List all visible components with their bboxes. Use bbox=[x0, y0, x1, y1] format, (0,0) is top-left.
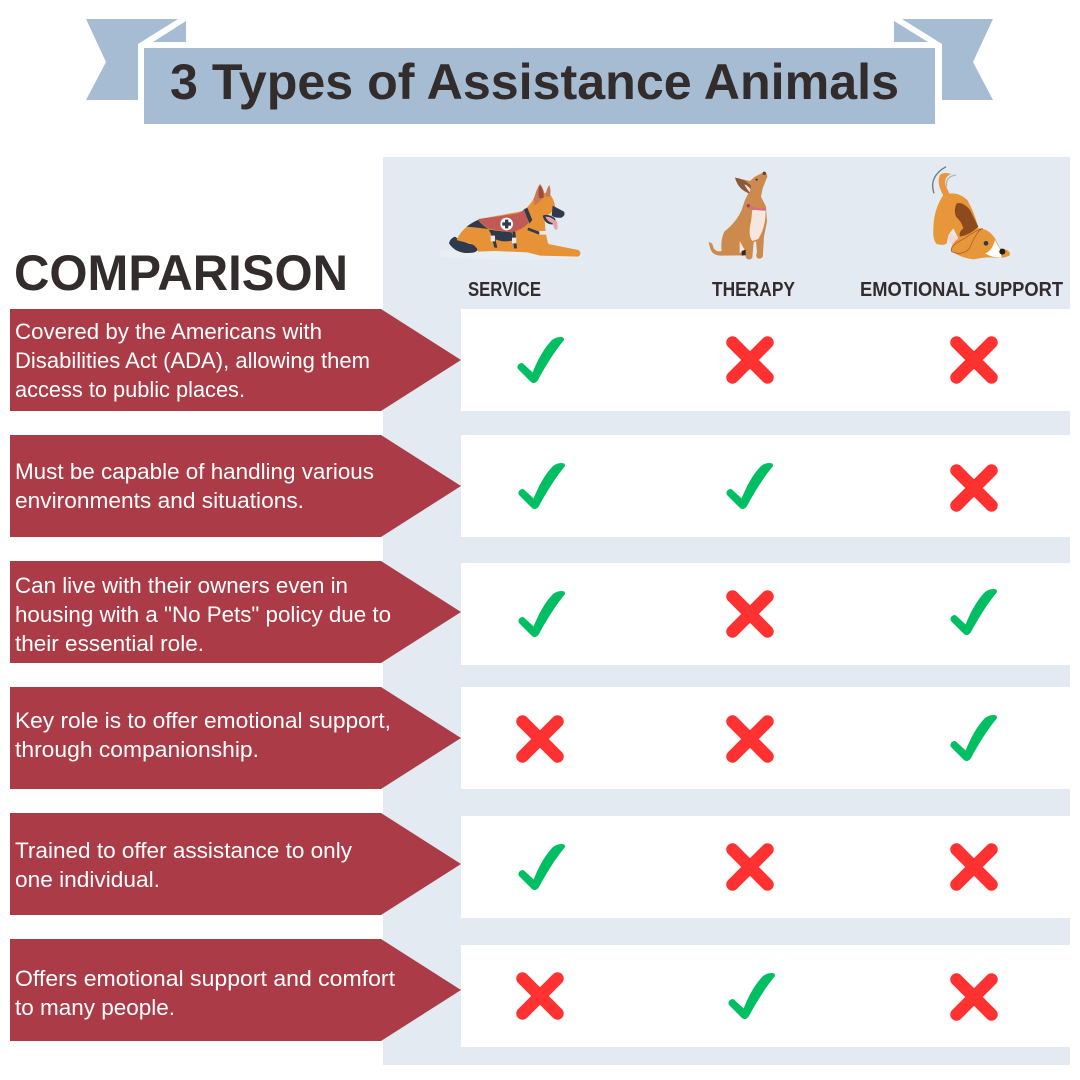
row 3 emotional: check bbox=[950, 589, 997, 635]
row 5 bbox=[10, 813, 1070, 918]
row 4 text: Key role is to offer emotional support, bbox=[15, 708, 391, 733]
banner left ribbon tail bbox=[86, 19, 178, 100]
row 4 service: cross bbox=[522, 722, 558, 756]
row 6 text: to many people. bbox=[15, 995, 175, 1020]
row 4 white strip bbox=[461, 687, 1070, 789]
title: 3 Types of Assistance Animals bbox=[170, 54, 899, 110]
row 1 emotional: cross bbox=[956, 342, 992, 378]
row 4 bbox=[10, 687, 1070, 789]
row 6 arrow label bbox=[10, 939, 461, 1041]
row 6 bbox=[10, 939, 1070, 1047]
row 2 service: check bbox=[518, 463, 565, 509]
row 2 bbox=[10, 435, 1070, 537]
banner main plate bbox=[144, 48, 935, 124]
row 2 arrow label bbox=[10, 435, 461, 537]
row 2 white strip bbox=[461, 435, 1070, 537]
row 3 text: Can live with their owners even in bbox=[15, 573, 348, 598]
icon: service dog bbox=[440, 184, 583, 260]
row 1 text bbox=[15, 319, 370, 402]
row 3 text: housing with a "No Pets" policy due to bbox=[15, 602, 391, 627]
row 1 bbox=[10, 309, 1070, 411]
column header: therapy: THERAPY bbox=[712, 279, 796, 301]
panel: comparison table background bbox=[383, 157, 1070, 1065]
row 4 arrow label bbox=[10, 687, 461, 789]
row 6 emotional: cross bbox=[956, 980, 992, 1014]
row 5 text: one individual. bbox=[15, 867, 160, 892]
row 6 service: cross bbox=[522, 978, 558, 1014]
row 4 text: through companionship. bbox=[15, 737, 259, 762]
row 1 text: Covered by the Americans with bbox=[15, 319, 322, 344]
row 1 white strip bbox=[461, 309, 1070, 411]
banner right ribbon tail bbox=[902, 19, 993, 100]
column header: service: SERVICE bbox=[468, 279, 541, 301]
row 4 therapy: cross bbox=[732, 722, 768, 756]
row 5 emotional: cross bbox=[956, 850, 992, 884]
row 5 text: Trained to offer assistance to only bbox=[15, 838, 352, 863]
row 5 white strip bbox=[461, 816, 1070, 918]
row 5 text bbox=[15, 838, 352, 892]
row 1 therapy: cross bbox=[732, 342, 768, 378]
row 3 text: their essential role. bbox=[15, 631, 204, 656]
comparison heading: COMPARISON bbox=[14, 245, 348, 301]
row 1 text: Disabilities Act (ADA), allowing them bbox=[15, 348, 370, 373]
row 6 therapy: check bbox=[728, 973, 775, 1019]
row 4 text bbox=[15, 708, 391, 762]
row 2 text bbox=[15, 459, 374, 513]
icon: emotional support dog bbox=[933, 167, 1010, 259]
column header: emotional support: EMOTIONAL SUPPORT bbox=[860, 279, 1063, 301]
icon: therapy dog bbox=[709, 172, 767, 259]
row 3 therapy: cross bbox=[732, 596, 768, 632]
row 1 arrow label bbox=[10, 309, 461, 411]
row 6 white strip bbox=[461, 945, 1070, 1047]
row 5 service: check bbox=[518, 844, 565, 890]
banner left fold bbox=[153, 21, 186, 42]
row 3 white strip bbox=[461, 563, 1070, 665]
row 5 therapy: cross bbox=[732, 850, 768, 884]
row 6 text: Offers emotional support and comfort bbox=[15, 966, 395, 991]
row 3 arrow label bbox=[10, 561, 461, 663]
row 4 emotional: check bbox=[950, 715, 997, 761]
row 2 emotional: cross bbox=[956, 470, 992, 506]
row 3 service: check bbox=[518, 591, 565, 637]
title banner bbox=[86, 19, 993, 124]
row 3 bbox=[10, 561, 1070, 665]
row 5 arrow label bbox=[10, 813, 461, 915]
row 2 therapy: check bbox=[726, 463, 773, 509]
row 6 text bbox=[15, 966, 395, 1020]
row 3 text bbox=[15, 573, 391, 656]
banner right fold bbox=[894, 21, 928, 42]
row 2 text: Must be capable of handling various bbox=[15, 459, 374, 484]
row 2 text: environments and situations. bbox=[15, 488, 304, 513]
row 1 service: check bbox=[517, 337, 564, 383]
row 1 text: access to public places. bbox=[15, 377, 245, 402]
